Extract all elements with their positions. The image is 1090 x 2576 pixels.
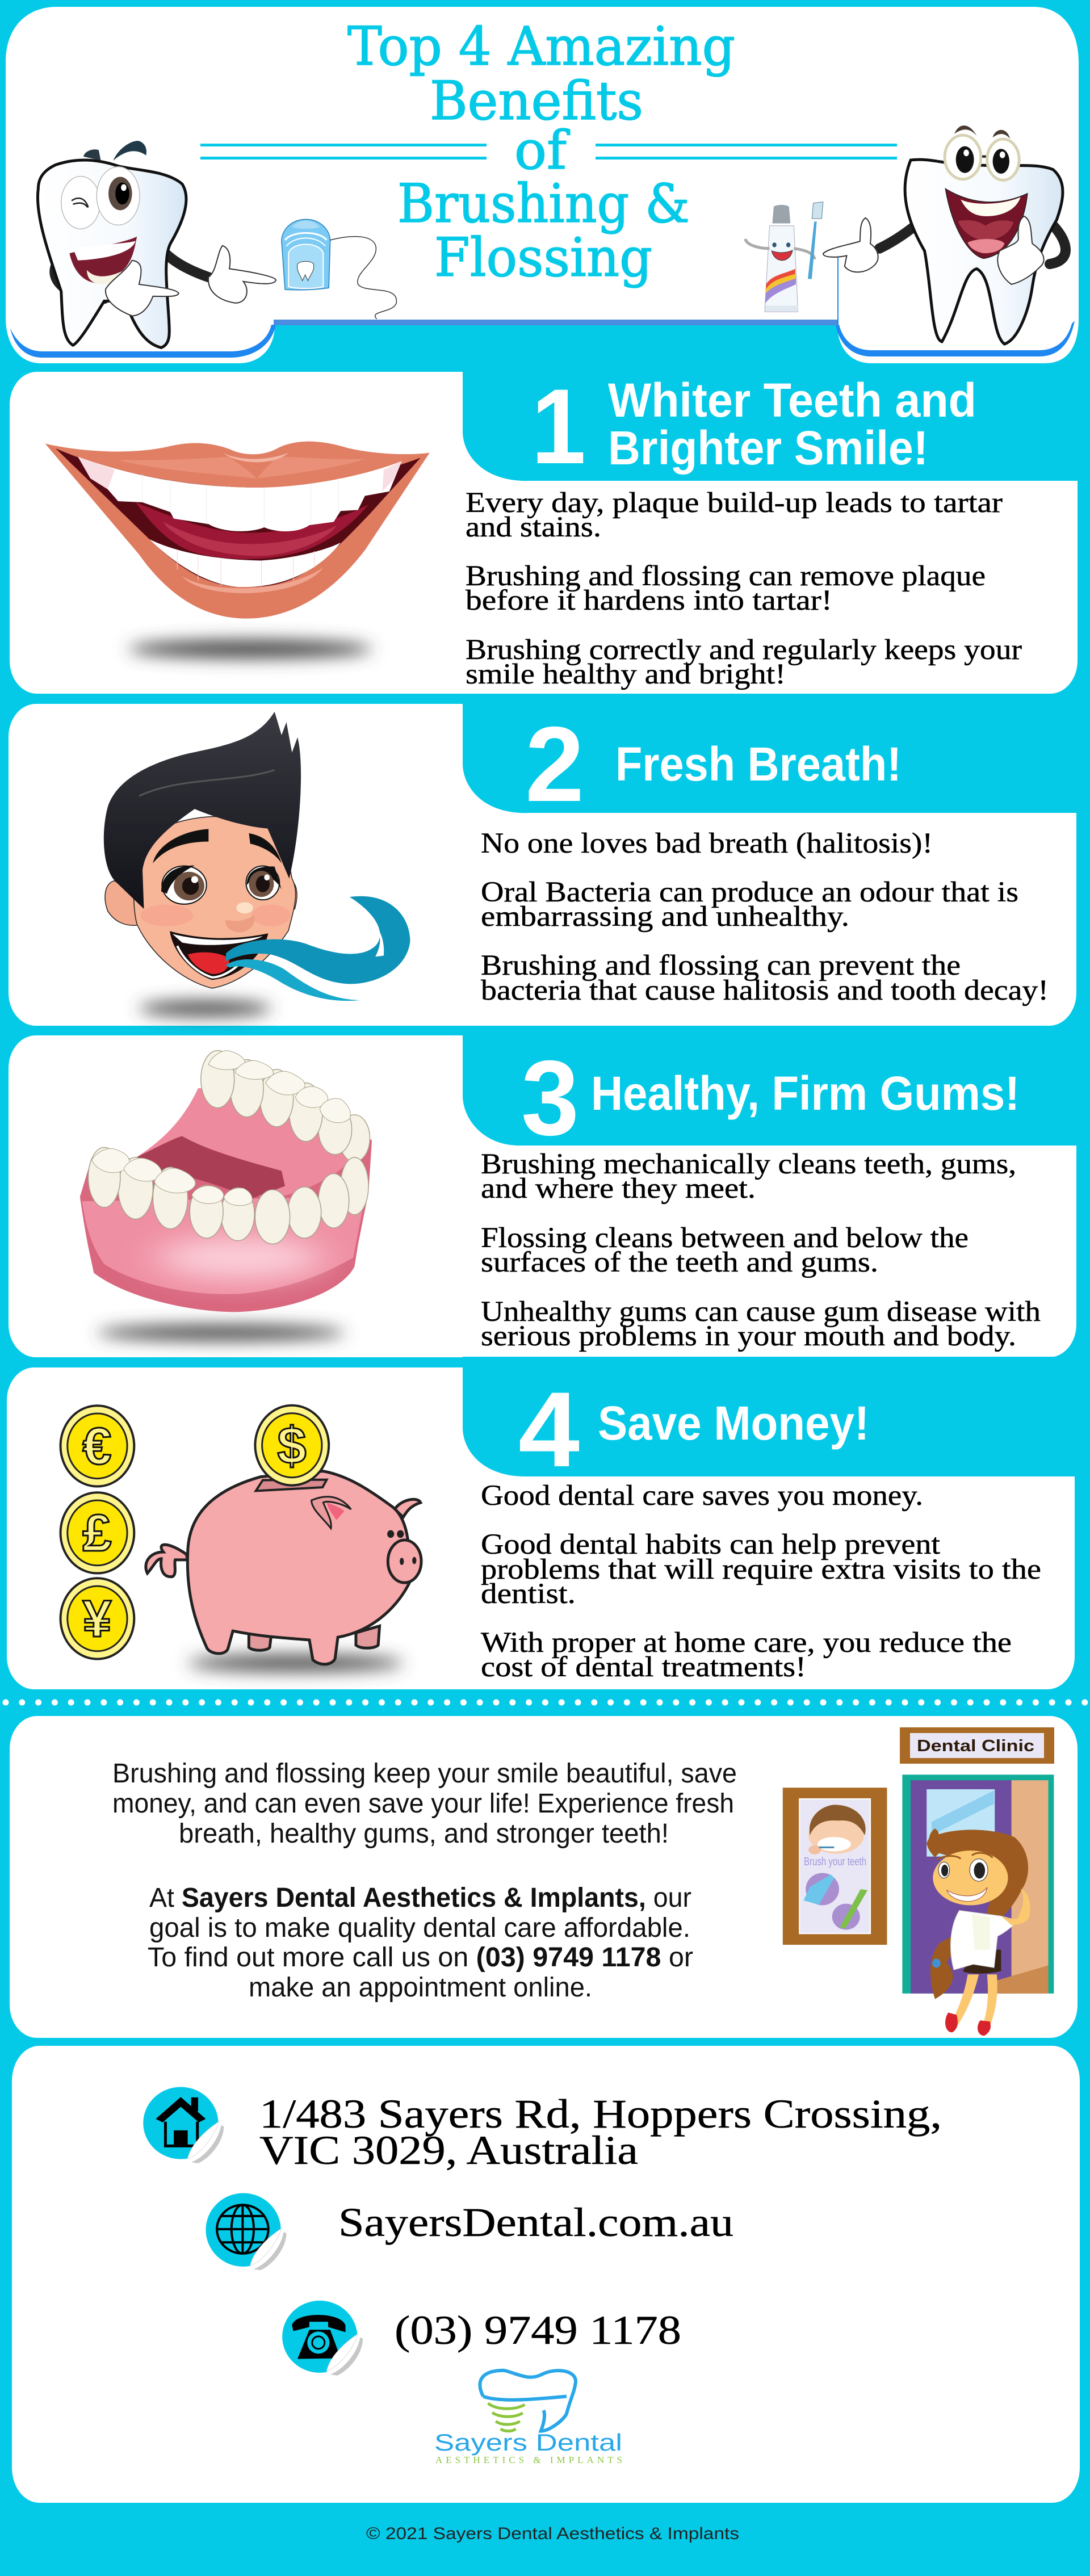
text block 4: problems that will require extra visits to the [481, 1554, 1041, 1585]
number 4: 4 [518, 1370, 580, 1489]
text: address [259, 2091, 942, 2173]
number 1: 1 [531, 367, 586, 486]
text block 3: serious problems in your mouth and body. [481, 1320, 1016, 1352]
icon: coins: € [82, 1417, 112, 1475]
text block 4: cost of dental treatments! [481, 1651, 806, 1683]
icon: toothpaste and toothbrush [745, 202, 823, 312]
heading 4: Save Money! [598, 1396, 869, 1450]
text block 2: bacteria that cause halitosis and tooth decay! [481, 975, 1049, 1006]
icon: coins: £ [82, 1504, 112, 1562]
footer copyright: © 2021 Sayers Dental Aesthetics & Implants [366, 2524, 739, 2543]
icon: house [143, 2087, 224, 2163]
header band 3 [463, 1027, 1090, 1146]
heading 3: Healthy, Firm Gums! [591, 1067, 1020, 1120]
logo: Sayers Dental: AESTHETICS & IMPLANTS [435, 2455, 622, 2465]
text block 4: Good dental habits can help prevent [481, 1529, 940, 1560]
text block 3: and where they meet. [481, 1173, 756, 1205]
text block 2: No one loves bad breath (halitosis)! [481, 828, 933, 859]
header band 2 [463, 698, 1090, 813]
text block 4 [481, 1480, 1041, 1683]
panel: benefit 1 [10, 363, 1090, 694]
text block: summary: make an appointment online. [249, 1973, 592, 2003]
text block 2: embarrassing and unhealthy. [481, 901, 849, 933]
text block 3 [481, 1148, 1041, 1352]
heading 1: Whiter Teeth and [608, 374, 976, 427]
text block 1: before it hardens into tartar! [466, 585, 832, 616]
text block: summary: goal is to make quality dental care affordable. [149, 1913, 690, 1943]
panel: benefit 2 [9, 698, 1090, 1026]
panel: benefit 3 [9, 1027, 1090, 1357]
poster: brush your teeth: Brush your teeth [804, 1856, 866, 1868]
text block: summary: breath, healthy gums, and stronger teeth! [179, 1819, 669, 1849]
text block 2: Brushing and flossing can prevent the [481, 950, 961, 981]
logo: Sayers Dental [434, 2371, 622, 2465]
title [347, 16, 735, 289]
panel: contact details [12, 2046, 1080, 2503]
title: Brushing & [397, 173, 690, 235]
text block 4: Good dental care saves you money. [481, 1480, 923, 1512]
number 3: 3 [521, 1038, 579, 1157]
header band 1 [463, 363, 1090, 481]
text block: summary: At Sayers Dental Aesthetics & Implants, our [149, 1883, 691, 1913]
text block 1: and stains. [466, 511, 601, 543]
icon: piggy bank [146, 1471, 421, 1671]
dotted divider row [6, 1700, 1090, 1705]
illustration: dentist at clinic door [902, 1774, 1054, 2036]
icon: globe [206, 2193, 286, 2270]
icon: coins [61, 1406, 329, 1659]
icon: coins: $ [277, 1417, 307, 1475]
icon: gums and teeth [80, 1051, 372, 1340]
panel: closing message [10, 1716, 1078, 2038]
text block 1: Brushing correctly and regularly keeps your [466, 634, 1022, 666]
text block 1: Brushing and flossing can remove plaque [466, 560, 986, 592]
icon: smiling mouth [45, 442, 430, 658]
icon: winking tooth character [37, 141, 276, 347]
text: address: 1/483 Sayers Rd, Hoppers Crossing, [259, 2091, 942, 2137]
panel: header [6, 7, 1079, 363]
logo: Sayers Dental: Sayers Dental [434, 2429, 622, 2456]
text block: summary: Brushing and flossing keep your smile beautiful, save [112, 1759, 737, 1789]
icon: telephone [282, 2301, 363, 2376]
text block 3: Flossing cleans between and below the [481, 1222, 969, 1254]
text block 3: Brushing mechanically cleans teeth, gums, [481, 1148, 1016, 1180]
text block 4: dentist. [481, 1578, 576, 1610]
heading 2: Fresh Breath! [615, 737, 902, 791]
icon: coins: ¥ [82, 1590, 112, 1648]
header band 4 [463, 1357, 1090, 1476]
text: phone: (03) 9749 1178 [395, 2308, 681, 2353]
heading 1: Brighter Smile! [608, 421, 928, 475]
text block 2: Oral Bacteria can produce an odour that is [481, 876, 1018, 908]
text block: summary: money, and can even save your life! Experience fresh [112, 1789, 734, 1819]
text block 3: Unhealthy gums can cause gum disease with [481, 1296, 1041, 1328]
heading 1 [608, 374, 976, 475]
sign: dental clinic: Dental Clinic [917, 1737, 1034, 1755]
panel: benefit 4 [7, 1357, 1090, 1689]
text block 4: With proper at home care, you reduce the [481, 1627, 1012, 1659]
poster: brush your teeth [783, 1788, 887, 1945]
text block 3: surfaces of the teeth and gums. [481, 1247, 878, 1278]
icon: happy tooth character with glasses [823, 125, 1066, 344]
icon: boy with fresh breath [104, 712, 410, 1016]
title: Top 4 Amazing [347, 16, 735, 78]
text block 1 [466, 487, 1022, 690]
text block 1: Every day, plaque build-up leads to tartar [466, 487, 1003, 519]
text: address: VIC 3029, Australia [259, 2128, 638, 2173]
title: of [514, 120, 570, 182]
number 2: 2 [525, 704, 584, 824]
sign: dental clinic [900, 1727, 1054, 1764]
text block: summary [112, 1759, 737, 2003]
text block 2 [481, 828, 1049, 1006]
text block: summary: To find out more call us on (03) 9749 1178 or [148, 1943, 693, 1973]
title: Benefits [430, 70, 643, 132]
title: Flossing [434, 227, 652, 289]
text block 1: smile healthy and bright! [466, 658, 786, 690]
text: website: SayersDental.com.au [338, 2200, 733, 2245]
icon: dental floss dispenser [282, 219, 396, 319]
